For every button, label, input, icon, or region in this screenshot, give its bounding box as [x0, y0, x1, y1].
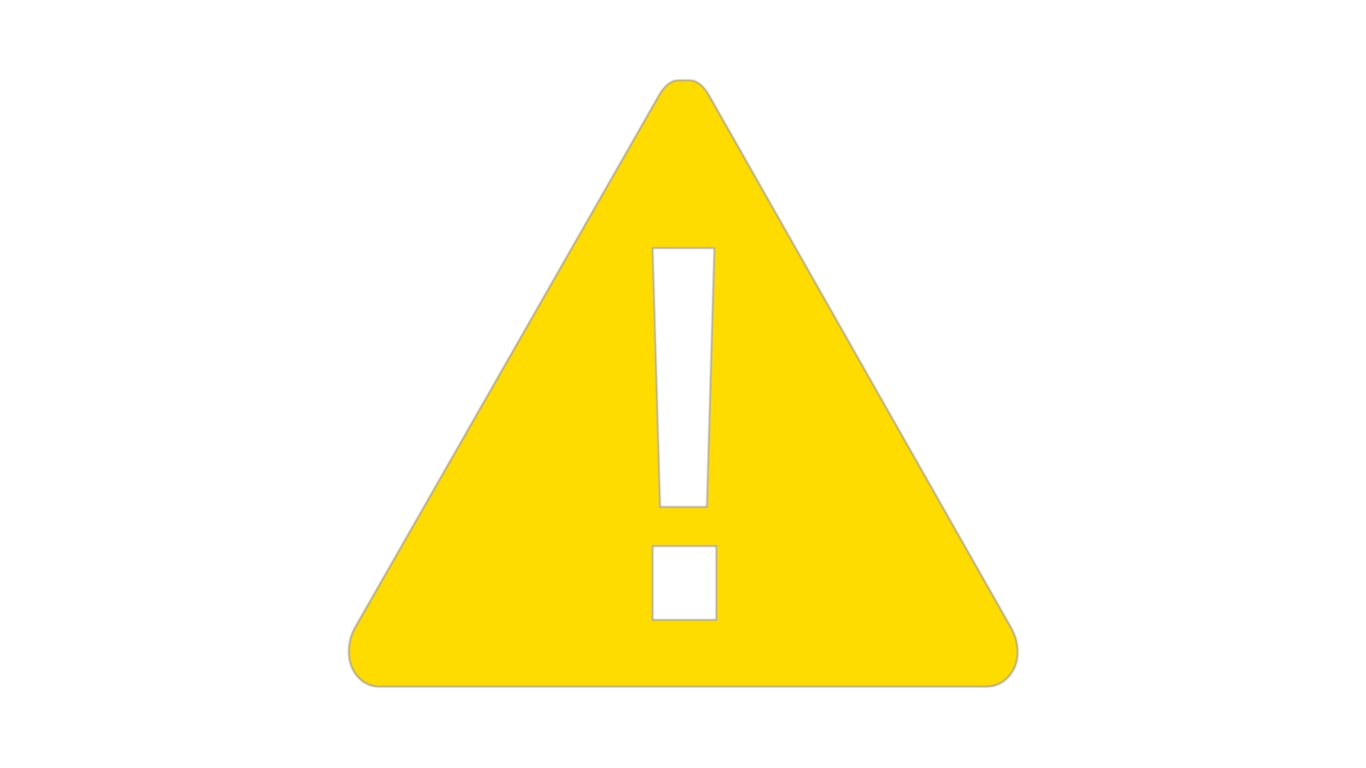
exclamation mark stem: [652, 248, 714, 507]
warning triangle body: [349, 80, 1018, 686]
exclamation mark dot: [652, 546, 716, 620]
icon: yellow warning triangle with exclamation mark: [349, 80, 1018, 686]
